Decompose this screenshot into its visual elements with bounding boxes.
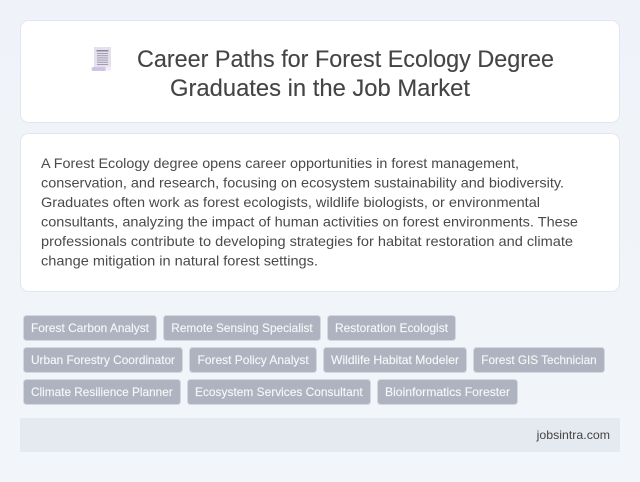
tag: Urban Forestry Coordinator: Urban Forestry Coordinator xyxy=(31,353,175,367)
tag: Ecosystem Services Consultant: Ecosystem Services Consultant xyxy=(195,385,363,399)
icon: document scroll xyxy=(92,47,111,71)
tag: Wildlife Habitat Modeler: Wildlife Habitat Modeler xyxy=(331,353,459,367)
text block: description: consultants, analyzing the impact of human activities on forest environments. These xyxy=(41,214,578,230)
tag: Ecosystem Services Consultant xyxy=(188,380,370,404)
tag: Restoration Ecologist xyxy=(328,316,456,340)
tag: Bioinformatics Forester: Bioinformatics Forester xyxy=(385,385,510,399)
tag: Forest Policy Analyst: Forest Policy Analyst xyxy=(198,353,309,367)
tag: Climate Resilience Planner xyxy=(24,380,180,404)
tag: Bioinformatics Forester xyxy=(378,380,518,404)
tag list: career roles xyxy=(24,316,604,404)
panel: header xyxy=(20,20,620,122)
text block: description: A Forest Ecology degree opens career opportunities in forest management, xyxy=(41,155,519,171)
tag: Remote Sensing Specialist: Remote Sensing Specialist xyxy=(171,321,313,335)
tag: Forest Carbon Analyst: Forest Carbon Analyst xyxy=(31,321,150,335)
title xyxy=(137,46,554,102)
text block: description: Graduates often work as forest ecologists, wildlife biologists, or environmental xyxy=(41,194,540,210)
tag: Forest GIS Technician: Forest GIS Technician xyxy=(481,353,597,367)
tag: Restoration Ecologist: Restoration Ecologist xyxy=(335,321,449,335)
footer xyxy=(20,418,620,452)
panel: description xyxy=(20,134,620,292)
tag: Forest Carbon Analyst xyxy=(24,316,156,340)
title: Graduates in the Job Market xyxy=(170,75,470,102)
footer: jobsintra.com xyxy=(536,428,610,442)
tag: Forest Policy Analyst xyxy=(190,348,316,372)
tag: Wildlife Habitat Modeler xyxy=(324,348,466,372)
tag: Climate Resilience Planner: Climate Resilience Planner xyxy=(31,385,173,399)
text block: description: conservation, and research, focusing on ecosystem sustainability and biodiversity. xyxy=(41,174,564,190)
text block: description xyxy=(41,155,578,268)
text block: description: change mitigation in natural forest settings. xyxy=(41,252,318,268)
tag: Remote Sensing Specialist xyxy=(164,316,320,340)
text block: description: professionals contribute to developing strategies for habitat restoration and climate xyxy=(41,233,573,249)
tag: Forest GIS Technician xyxy=(474,348,604,372)
tag: Urban Forestry Coordinator xyxy=(24,348,182,372)
title: Career Paths for Forest Ecology Degree xyxy=(137,46,554,73)
